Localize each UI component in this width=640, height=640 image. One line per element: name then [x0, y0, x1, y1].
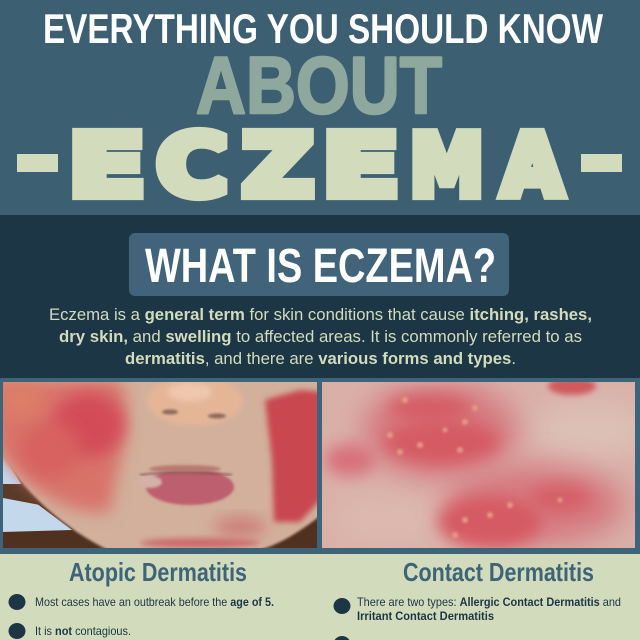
- rash patches: [324, 377, 625, 548]
- description text: dermatitis, and there are various forms and types.: [125, 349, 516, 368]
- red chin spots: [140, 517, 266, 548]
- description text: dry skin, and swelling to affected areas. It is commonly referred to as: [59, 327, 582, 346]
- right dash: [581, 154, 622, 172]
- title word: about: ABOUT: [196, 41, 442, 131]
- block letters: E: [69, 117, 145, 216]
- heading: Contact Dermatitis: [403, 557, 594, 587]
- blisters: [387, 397, 562, 538]
- bullet: [8, 594, 26, 610]
- text: There are two types: Allergic Contact Dermatitis and: [357, 595, 621, 609]
- text: Irritant Contact Dermatitis: [357, 609, 494, 623]
- heading: Atopic Dermatitis: [69, 557, 247, 587]
- red cheek right: [265, 390, 325, 522]
- title word: eczema: A: [502, 117, 563, 216]
- column: contact dermatitis: [334, 557, 621, 640]
- description text: [49, 305, 592, 368]
- bullet: [8, 623, 26, 639]
- title word: eczema: Z: [242, 116, 313, 215]
- bullet: [334, 636, 350, 640]
- photo: contact dermatitis rash: [322, 377, 640, 550]
- title word: eczema: [17, 116, 622, 216]
- red cheek left: [0, 380, 126, 512]
- text: Most cases have an outbreak before the age of 5.: [35, 595, 274, 609]
- photo frame: [0, 378, 640, 554]
- text: It is not contagious.: [35, 624, 131, 638]
- title word: eczema: M: [410, 116, 484, 215]
- column: atopic dermatitis: [8, 557, 274, 639]
- bullet: [334, 598, 350, 614]
- title word: eczema: C: [157, 116, 228, 216]
- panel: types of dermatitis: [0, 554, 640, 640]
- face: [0, 375, 325, 552]
- panel: what is eczema: [0, 215, 640, 378]
- title word: eczema: E: [323, 117, 399, 216]
- clothing stripes: [3, 456, 317, 548]
- left dash: [17, 154, 58, 172]
- nose: [147, 382, 243, 426]
- description text: Eczema is a general term for skin conditions that cause itching, rashes,: [49, 305, 592, 324]
- heading: WHAT IS ECZEMA?: [145, 240, 496, 293]
- lips: [138, 465, 234, 505]
- header panel: [0, 0, 640, 216]
- photo: atopic dermatitis on a baby's face: [0, 375, 325, 552]
- heading box: [129, 233, 509, 296]
